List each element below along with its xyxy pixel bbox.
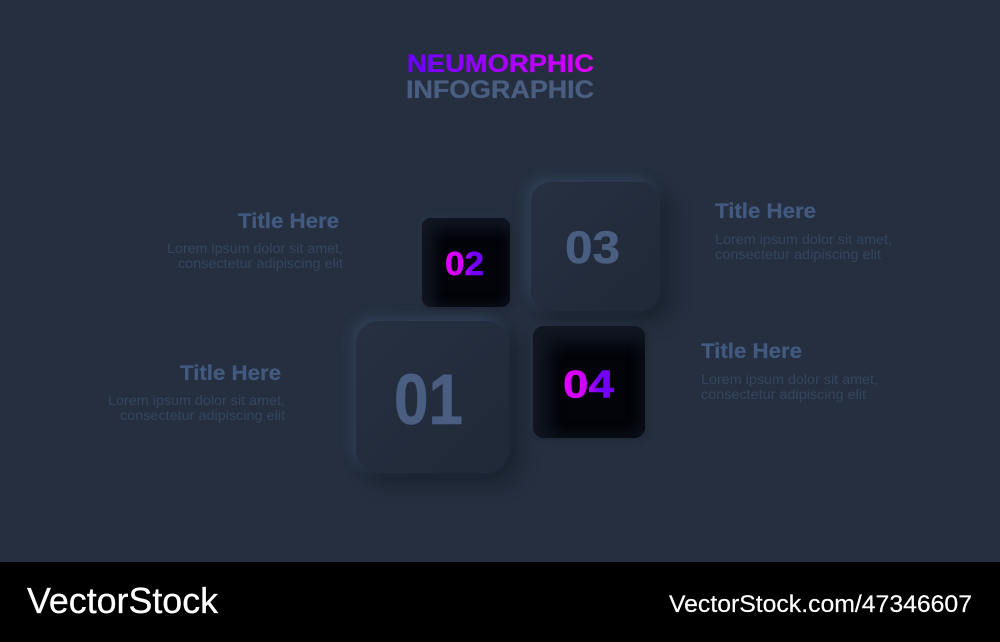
number 03: 03 bbox=[565, 222, 620, 273]
footer bar bbox=[0, 562, 1000, 642]
number 02: 02 bbox=[445, 245, 484, 282]
text block 02: Lorem ipsum dolor sit amet, bbox=[167, 241, 343, 256]
text block 02: Title Here bbox=[238, 210, 339, 233]
text block 02 bbox=[167, 210, 343, 271]
text block 01: Lorem ipsum dolor sit amet, bbox=[108, 393, 285, 408]
title: NEUMORPHIC bbox=[407, 50, 594, 78]
title: INFOGRAPHIC bbox=[406, 76, 594, 104]
text block 01: Title Here bbox=[180, 362, 281, 385]
text block 04: consectetur adipiscing elit bbox=[701, 387, 866, 402]
text block 01: consectetur adipiscing elit bbox=[120, 408, 285, 423]
text block 02: consectetur adipiscing elit bbox=[178, 256, 343, 271]
text block 04: Lorem ipsum dolor sit amet, bbox=[701, 372, 878, 387]
text block 03: Title Here bbox=[715, 200, 816, 223]
tile 03 bbox=[531, 182, 660, 311]
text block 03: Lorem ipsum dolor sit amet, bbox=[715, 232, 892, 247]
well 02 bbox=[422, 218, 510, 307]
text block 04 bbox=[701, 340, 878, 402]
number 01: 01 bbox=[394, 361, 463, 440]
footer logo: VectorStock bbox=[27, 580, 219, 621]
tile 01 bbox=[356, 321, 509, 473]
text block 03 bbox=[715, 200, 892, 262]
footer url: VectorStock.com/47346607 bbox=[669, 591, 972, 618]
text block 03: consectetur adipiscing elit bbox=[715, 247, 881, 262]
well 04 bbox=[533, 326, 645, 438]
number 04: 04 bbox=[563, 364, 614, 406]
text block 01 bbox=[108, 362, 285, 423]
title bbox=[406, 50, 594, 104]
text block 04: Title Here bbox=[701, 340, 802, 363]
